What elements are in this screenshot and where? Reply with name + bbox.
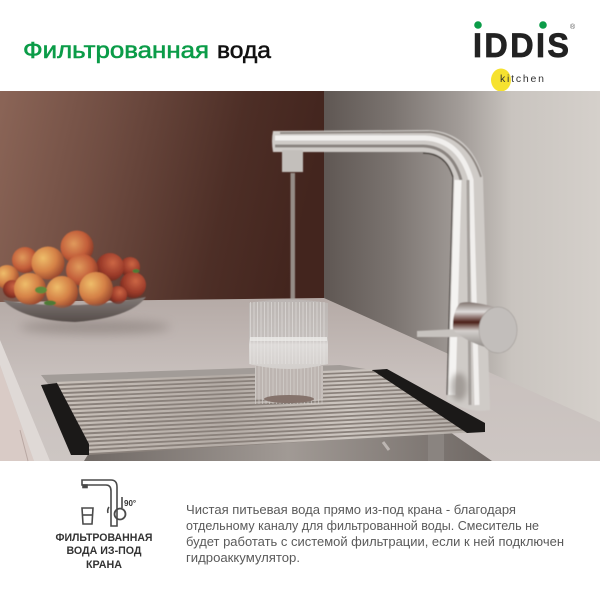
bowl shadow — [20, 320, 170, 334]
title: вода — [217, 37, 271, 63]
sink basin — [84, 430, 492, 461]
icon caption: ФИЛЬТРОВАННАЯ — [56, 532, 153, 544]
bowl of peaches — [0, 230, 146, 322]
water stream — [290, 173, 295, 303]
description text — [186, 502, 564, 565]
icon caption: КРАНА — [86, 559, 122, 571]
drying mat — [41, 369, 485, 455]
handle — [453, 302, 498, 350]
faucet reflections — [275, 132, 481, 405]
faucet body and spout — [272, 130, 490, 411]
faucet base reflection — [451, 373, 467, 401]
icon caption: ВОДА ИЗ-ПОД — [66, 545, 142, 557]
faucet — [272, 130, 517, 411]
logo: IDDIS kitchen: kitchen — [500, 73, 544, 85]
title — [23, 37, 271, 63]
lever — [417, 328, 478, 337]
cabinet front — [0, 340, 50, 461]
logo: IDDIS kitchen — [473, 21, 576, 92]
kitchen photo — [0, 91, 600, 461]
title: Фильтрованная — [23, 37, 209, 63]
icon caption — [56, 532, 153, 571]
wall: grey — [324, 91, 600, 431]
logo: IDDIS kitchen: IDDIS — [473, 27, 569, 65]
description text: отдельному каналу для фильтрованной воды. Смеситель не — [186, 518, 539, 533]
description text: будет работать с системой фильтрации, если к ней подключен — [186, 534, 564, 549]
ribbed glass — [249, 300, 328, 403]
countertop — [0, 298, 600, 461]
logo: IDDIS kitchen: ® — [570, 23, 576, 31]
description text: гидроаккумулятор. — [186, 550, 300, 565]
sink lip — [41, 365, 372, 384]
nozzle — [282, 150, 303, 172]
description text: Чистая питьевая вода прямо из-под крана - благодаря — [186, 502, 516, 517]
icon: faucet with 90 degree rotation: 90° — [124, 499, 136, 508]
wall: brown — [0, 91, 325, 306]
icon: faucet with 90 degree rotation — [82, 480, 136, 526]
